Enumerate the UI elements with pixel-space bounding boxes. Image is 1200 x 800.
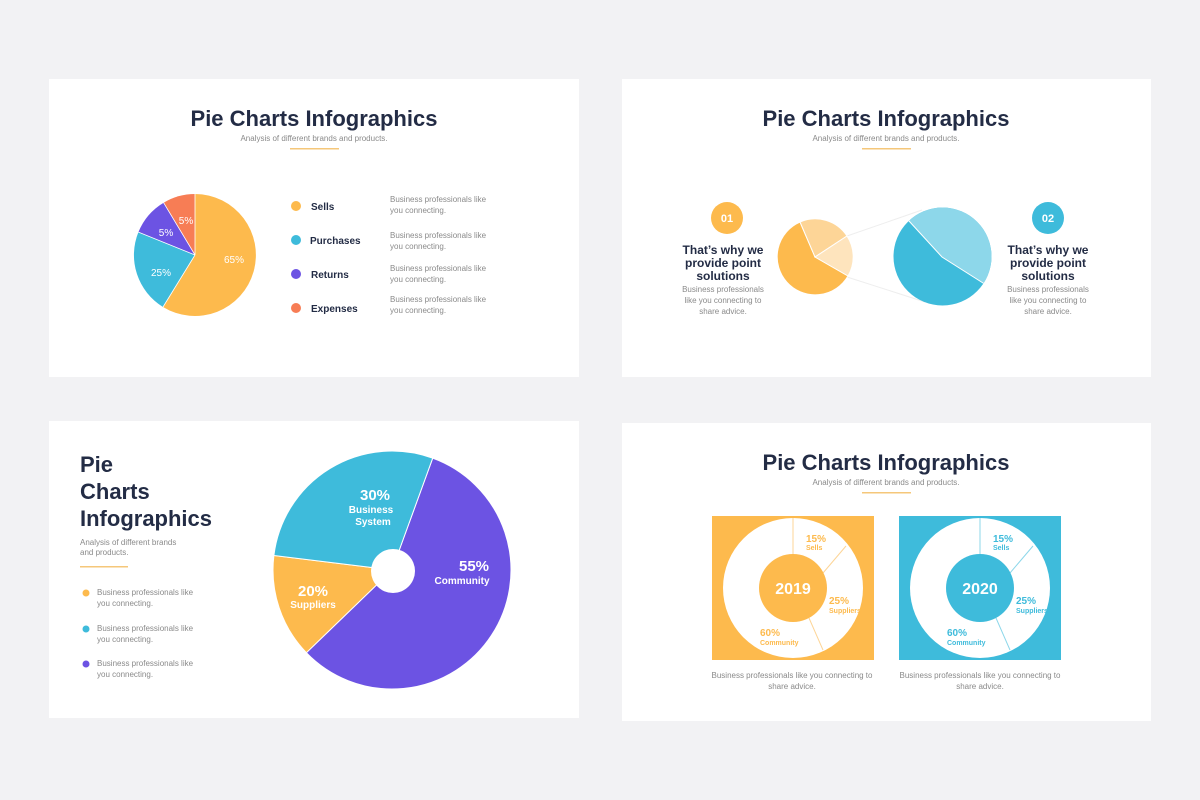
donut 2019 <box>712 516 874 660</box>
pie labels: Suppliers <box>290 600 336 611</box>
text block left <box>682 243 764 316</box>
legend descriptions <box>390 195 487 315</box>
donut 2020: Suppliers <box>1016 608 1048 615</box>
subtitle: Analysis of different brands <box>80 538 176 547</box>
title: Charts <box>80 479 150 504</box>
donut 2019: 15% <box>806 534 826 545</box>
legend: Purchases <box>310 236 361 247</box>
text block right: Business professionals <box>1007 285 1089 294</box>
caption 2019: Business professionals like you connecting to <box>712 671 873 680</box>
caption 2019 <box>712 671 873 691</box>
text block left: That’s why we <box>683 243 764 257</box>
pie chart: 5% <box>179 216 193 227</box>
bullet list: Business professionals like <box>97 588 194 597</box>
text block left: share advice. <box>699 307 747 316</box>
caption 2020: Business professionals like you connecting to <box>900 671 1061 680</box>
caption 2020 <box>900 671 1061 691</box>
pie labels: 20% <box>298 583 328 600</box>
legend descriptions: you connecting. <box>390 206 446 215</box>
donut 2020: 2020 <box>962 581 998 598</box>
pie labels: 55% <box>459 558 489 575</box>
legend descriptions: Business professionals like <box>390 231 487 240</box>
panel: legend pie <box>49 79 579 377</box>
panel: big pie <box>49 421 579 718</box>
donut 2020: Sells <box>993 545 1009 552</box>
pie chart: 25% <box>151 268 171 279</box>
panel: donut boxes <box>622 423 1151 721</box>
subtitle: Analysis of different brands and products. <box>812 134 960 143</box>
text block right: provide point <box>1010 256 1086 270</box>
text block right: like you connecting to <box>1010 296 1087 305</box>
legend: Sells <box>311 202 335 213</box>
panel: exploded pie <box>622 79 1151 377</box>
legend <box>291 201 361 315</box>
legend descriptions: Business professionals like <box>390 264 487 273</box>
bullet list: Business professionals like <box>97 624 194 633</box>
panel: big pie: and products. <box>80 548 128 557</box>
text block right: solutions <box>1021 269 1075 283</box>
donut 2019: 2019 <box>775 581 811 598</box>
legend descriptions: Business professionals like <box>390 295 487 304</box>
pie labels <box>290 487 490 611</box>
big pie <box>894 208 992 306</box>
legend descriptions: you connecting. <box>390 242 446 251</box>
pie labels: Community <box>434 576 490 587</box>
legend descriptions: Business professionals like <box>390 195 487 204</box>
text block right <box>1007 243 1089 316</box>
text block left: like you connecting to <box>685 296 762 305</box>
legend: Expenses <box>311 304 358 315</box>
donut 2020 <box>899 516 1061 660</box>
donut 2019: 60% <box>760 628 780 639</box>
badge 02: 02 <box>1042 213 1054 225</box>
legend descriptions: you connecting. <box>390 275 446 284</box>
text block right: That’s why we <box>1008 243 1089 257</box>
caption 2020: share advice. <box>956 682 1004 691</box>
title: Infographics <box>80 506 212 531</box>
badge 01 <box>711 202 743 234</box>
caption 2019: share advice. <box>768 682 816 691</box>
subtitle: Analysis of different brands and products. <box>240 134 388 143</box>
pie labels: Business <box>349 505 394 516</box>
connectors <box>847 210 925 302</box>
donut 2019: Community <box>760 640 799 647</box>
donut 2020: Community <box>947 640 986 647</box>
bullet list: Business professionals like <box>97 659 194 668</box>
donut 2019: 25% <box>829 596 849 607</box>
donut 2020: 25% <box>1016 596 1036 607</box>
donut 2020: 60% <box>947 628 967 639</box>
donut 2019: Suppliers <box>829 608 861 615</box>
title: Pie Charts Infographics <box>763 106 1009 131</box>
text block left: solutions <box>696 269 750 283</box>
bullet list <box>82 588 194 679</box>
pie chart <box>273 451 511 689</box>
pie chart <box>134 194 256 316</box>
legend: Returns <box>311 270 349 281</box>
title: Pie Charts Infographics <box>191 106 437 131</box>
pie labels: System <box>355 517 391 528</box>
title: Pie <box>80 452 113 477</box>
bullet list: you connecting. <box>97 670 153 679</box>
bullet list: you connecting. <box>97 635 153 644</box>
donut 2020: 15% <box>993 534 1013 545</box>
title: Pie Charts Infographics <box>763 450 1009 475</box>
small pie <box>777 219 853 295</box>
pie chart: 5% <box>159 228 173 239</box>
subtitle: Analysis of different brands and products. <box>812 478 960 487</box>
donut 2019: Sells <box>806 545 822 552</box>
pie chart: 65% <box>224 255 244 266</box>
badge 01: 01 <box>721 213 733 225</box>
text block left: Business professionals <box>682 285 764 294</box>
text block right: share advice. <box>1024 307 1072 316</box>
text block left: provide point <box>685 256 761 270</box>
pie labels: 30% <box>360 487 390 504</box>
legend descriptions: you connecting. <box>390 306 446 315</box>
badge 02 <box>1032 202 1064 234</box>
title <box>80 452 212 531</box>
bullet list: you connecting. <box>97 599 153 608</box>
